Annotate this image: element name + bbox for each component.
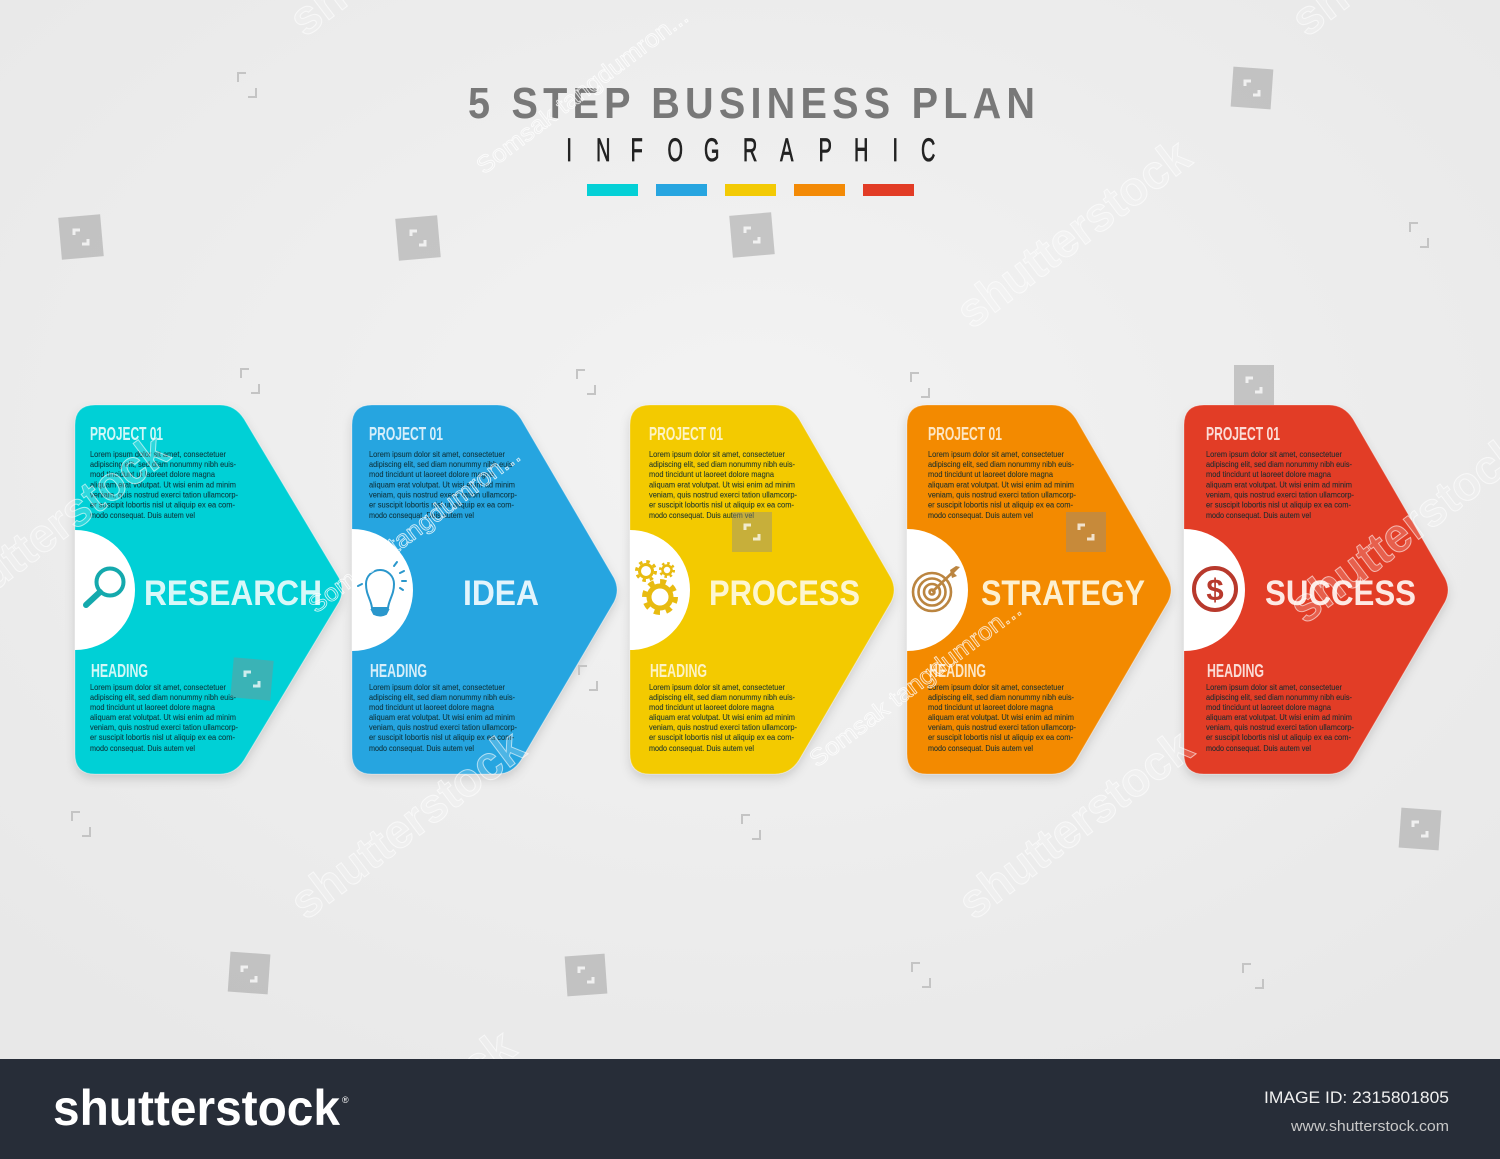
panel: strategy: veniam, quis nostrud exerci tation ullamcorp-: [928, 722, 1076, 732]
panel: strategy: mod tincidunt ut laoreet dolore magna: [928, 702, 1053, 712]
footer url: www.shutterstock.com: [1290, 1118, 1449, 1135]
panel: success: er suscipit lobortis nisl ut aliquip ex ea com-: [1206, 732, 1351, 742]
panel: strategy: aliquam erat volutpat. Ut wisi enim ad minim: [928, 480, 1074, 490]
panel: research: modo consequat. Duis autem vel: [90, 510, 195, 520]
icon: target: [913, 566, 960, 611]
panel: research: Lorem ipsum dolor sit amet, consectetuer: [90, 449, 226, 459]
panel: strategy: modo consequat. Duis autem vel: [928, 510, 1033, 520]
icon: gears: [636, 562, 676, 612]
panel: research: mod tincidunt ut laoreet dolore magna: [90, 702, 215, 712]
panel: idea: aliquam erat volutpat. Ut wisi enim ad minim: [369, 712, 515, 722]
watermark: contributor text: Somsak tangdumron...: [471, 3, 694, 180]
watermark: stock text: shutterstock: [947, 129, 1201, 339]
watermark: stock text: ck: [451, 1019, 526, 1094]
panel: research: RESEARCH: [144, 574, 322, 613]
watermark: contributor text: Somsak tangdumron...: [804, 596, 1027, 773]
panel: strategy: er suscipit lobortis nisl ut aliquip ex ea com-: [928, 732, 1073, 742]
panel: process: mod tincidunt ut laoreet dolore magna: [649, 469, 774, 479]
footer logo: shutterstock: [53, 1080, 340, 1136]
panel: idea: IDEA: [463, 574, 539, 613]
panel: process: Lorem ipsum dolor sit amet, consectetuer: [649, 682, 785, 692]
watermark: contributor text: [303, 3, 1027, 773]
panel: research: veniam, quis nostrud exerci tation ullamcorp-: [90, 722, 238, 732]
panel: research: modo consequat. Duis autem vel: [90, 743, 195, 753]
panel: success: Lorem ipsum dolor sit amet, consectetuer: [1206, 449, 1342, 459]
panel: idea: PROJECT 01: [369, 424, 443, 444]
title: 5 STEP BUSINESS PLAN: [468, 78, 1035, 127]
panel: research: er suscipit lobortis nisl ut aliquip ex ea com-: [90, 500, 235, 510]
panel: strategy: [907, 405, 1171, 774]
panel: success: HEADING: [1207, 661, 1264, 681]
panel: idea: er suscipit lobortis nisl ut aliquip ex ea com-: [369, 732, 514, 742]
icon: dollar coin: [1194, 568, 1236, 610]
panel: strategy: modo consequat. Duis autem vel: [928, 743, 1033, 753]
panel: idea: mod tincidunt ut laoreet dolore magna: [369, 469, 494, 479]
panel: strategy: PROJECT 01: [928, 424, 1002, 444]
panel: process: PROCESS: [709, 574, 860, 613]
panel: success: modo consequat. Duis autem vel: [1206, 743, 1311, 753]
panel: process: aliquam erat volutpat. Ut wisi enim ad minim: [649, 480, 795, 490]
icon: dollar coin: $: [1206, 572, 1224, 607]
panel: strategy: adipiscing elit, sed diam nonummy nibh euis-: [928, 692, 1074, 702]
panel: strategy: er suscipit lobortis nisl ut aliquip ex ea com-: [928, 500, 1073, 510]
panel: process: er suscipit lobortis nisl ut aliquip ex ea com-: [649, 500, 794, 510]
panel: success: adipiscing elit, sed diam nonummy nibh euis-: [1206, 459, 1352, 469]
panel: strategy: adipiscing elit, sed diam nonummy nibh euis-: [928, 459, 1074, 469]
panel: strategy: veniam, quis nostrud exerci tation ullamcorp-: [928, 490, 1076, 500]
panel: idea: modo consequat. Duis autem vel: [369, 743, 474, 753]
panel: idea: mod tincidunt ut laoreet dolore magna: [369, 702, 494, 712]
panel: idea: Lorem ipsum dolor sit amet, consectetuer: [369, 682, 505, 692]
panel: success: modo consequat. Duis autem vel: [1206, 510, 1311, 520]
panel: strategy: Lorem ipsum dolor sit amet, consectetuer: [928, 449, 1064, 459]
panel: research: veniam, quis nostrud exerci tation ullamcorp-: [90, 490, 238, 500]
panel: success: mod tincidunt ut laoreet dolore magna: [1206, 469, 1331, 479]
panel: success: adipiscing elit, sed diam nonummy nibh euis-: [1206, 692, 1352, 702]
panel: research: er suscipit lobortis nisl ut aliquip ex ea com-: [90, 732, 235, 742]
icon: light bulb: [358, 562, 406, 616]
panel: research: Lorem ipsum dolor sit amet, consectetuer: [90, 682, 226, 692]
panel: success: mod tincidunt ut laoreet dolore magna: [1206, 702, 1331, 712]
panel: process: aliquam erat volutpat. Ut wisi enim ad minim: [649, 712, 795, 722]
panel: idea: er suscipit lobortis nisl ut aliquip ex ea com-: [369, 500, 514, 510]
panel: research: adipiscing elit, sed diam nonummy nibh euis-: [90, 459, 236, 469]
panel: process: [630, 405, 894, 774]
panel: research: HEADING: [91, 661, 148, 681]
icon: magnifying glass: [86, 568, 124, 605]
footer bar: [0, 1059, 1500, 1159]
colour key bars: [587, 184, 914, 196]
panel: success: er suscipit lobortis nisl ut aliquip ex ea com-: [1206, 500, 1351, 510]
panel: idea: adipiscing elit, sed diam nonummy nibh euis-: [369, 459, 515, 469]
panel: research: adipiscing elit, sed diam nonummy nibh euis-: [90, 692, 236, 702]
panel: process: PROJECT 01: [649, 424, 723, 444]
watermark: square marks: [58, 67, 1441, 996]
panel: process: veniam, quis nostrud exerci tation ullamcorp-: [649, 490, 797, 500]
panel: research: aliquam erat volutpat. Ut wisi enim ad minim: [90, 712, 236, 722]
watermark: small outline marks: [72, 73, 1428, 988]
panel: process: Lorem ipsum dolor sit amet, consectetuer: [649, 449, 785, 459]
panel: research: mod tincidunt ut laoreet dolore magna: [90, 469, 215, 479]
panel: strategy: Lorem ipsum dolor sit amet, consectetuer: [928, 682, 1064, 692]
panel: process: veniam, quis nostrud exerci tation ullamcorp-: [649, 722, 797, 732]
panel: success: [1184, 405, 1448, 774]
panel: success: SUCCESS: [1265, 574, 1416, 613]
panel: research: PROJECT 01: [90, 424, 163, 444]
panel: strategy: mod tincidunt ut laoreet dolore magna: [928, 469, 1053, 479]
panel: strategy: aliquam erat volutpat. Ut wisi enim ad minim: [928, 712, 1074, 722]
panel: idea: adipiscing elit, sed diam nonummy nibh euis-: [369, 692, 515, 702]
panel: process: er suscipit lobortis nisl ut aliquip ex ea com-: [649, 732, 794, 742]
panel: idea: modo consequat. Duis autem vel: [369, 510, 474, 520]
panel: idea: Lorem ipsum dolor sit amet, consectetuer: [369, 449, 505, 459]
panel: process: mod tincidunt ut laoreet dolore magna: [649, 702, 774, 712]
panel: idea: veniam, quis nostrud exerci tation ullamcorp-: [369, 722, 517, 732]
panel: process: adipiscing elit, sed diam nonummy nibh euis-: [649, 692, 795, 702]
panel: success: Lorem ipsum dolor sit amet, consectetuer: [1206, 682, 1342, 692]
panel: success: aliquam erat volutpat. Ut wisi enim ad minim: [1206, 712, 1352, 722]
panel: research: aliquam erat volutpat. Ut wisi enim ad minim: [90, 480, 236, 490]
panel: strategy: STRATEGY: [981, 574, 1145, 613]
panel: strategy: HEADING: [929, 661, 986, 681]
footer logo: ®: [342, 1095, 349, 1105]
subtitle: INFOGRAPHIC: [566, 132, 935, 168]
panel: process: HEADING: [650, 661, 707, 681]
panel: success: aliquam erat volutpat. Ut wisi enim ad minim: [1206, 480, 1352, 490]
panel: success: PROJECT 01: [1206, 424, 1280, 444]
watermark: stock text: shutterstock: [281, 720, 535, 930]
panel: success: veniam, quis nostrud exerci tation ullamcorp-: [1206, 722, 1354, 732]
panel: idea: [352, 405, 617, 774]
panel: idea: HEADING: [370, 661, 427, 681]
watermark: contributor text: Somsak tangdumron...: [303, 442, 526, 619]
watermark: stock text: shutterstock: [949, 720, 1203, 930]
panel: process: modo consequat. Duis autem vel: [649, 510, 754, 520]
panel: process: modo consequat. Duis autem vel: [649, 743, 754, 753]
panel: success: veniam, quis nostrud exerci tation ullamcorp-: [1206, 490, 1354, 500]
footer image id: IMAGE ID: 2315801805: [1264, 1088, 1449, 1107]
panel: process: adipiscing elit, sed diam nonummy nibh euis-: [649, 459, 795, 469]
panel: research: [75, 405, 342, 774]
panel: idea: veniam, quis nostrud exerci tation ullamcorp-: [369, 490, 517, 500]
panel: idea: aliquam erat volutpat. Ut wisi enim ad minim: [369, 480, 515, 490]
